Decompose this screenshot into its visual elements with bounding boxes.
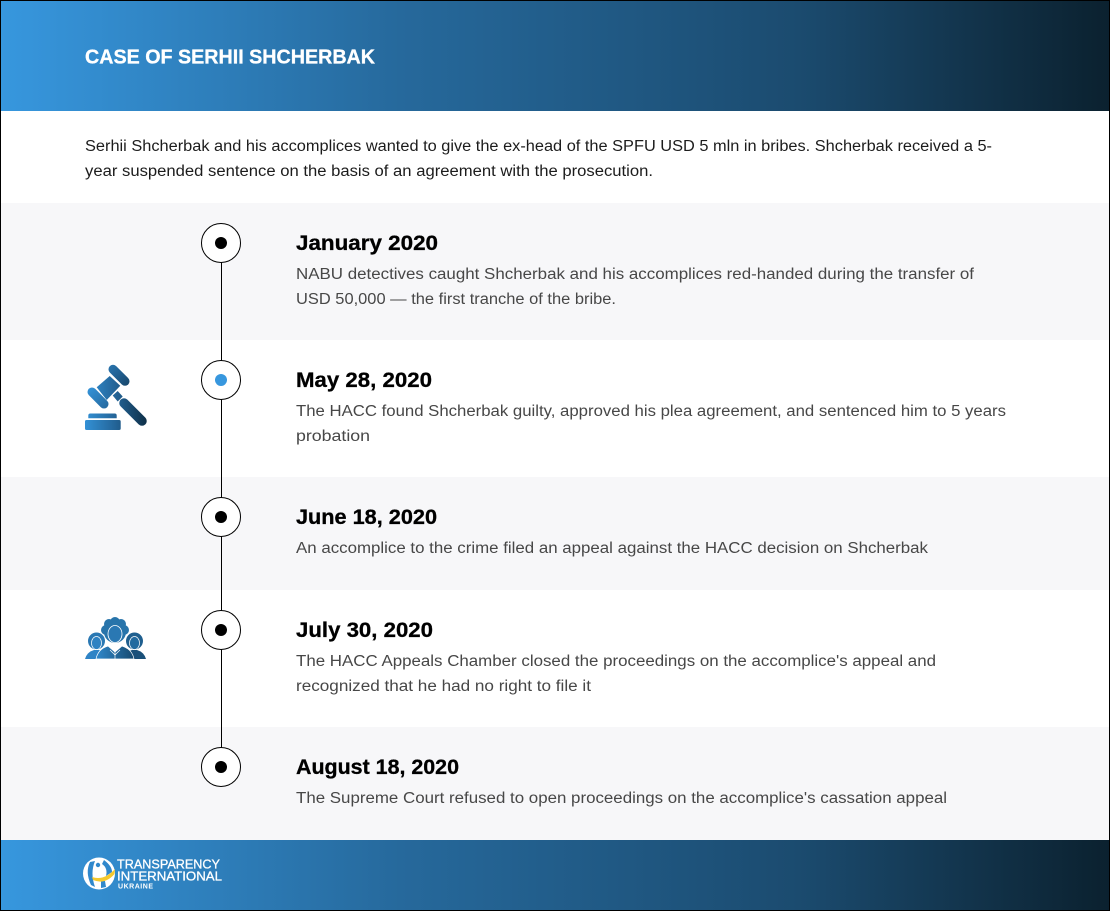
footer band xyxy=(1,840,1109,910)
logo: Transparency International Ukraine xyxy=(83,856,222,890)
timeline entry: January 2020 xyxy=(202,224,975,308)
marker: August 18, 2020 xyxy=(202,748,240,786)
description: July 30, 2020: recognized that he had no right to file it xyxy=(296,678,592,695)
description: January 2020: NABU detectives caught Shcherbak and his accomplices red-handed during the transfer of xyxy=(296,266,975,283)
title: CASE OF SERHII SHCHERBAK xyxy=(85,46,376,68)
logo wordmark: UKRAINE xyxy=(118,884,153,890)
description: May 28, 2020: probation xyxy=(296,428,370,445)
intro text xyxy=(85,138,992,180)
logo wordmark xyxy=(117,856,222,890)
date: June 18, 2020: June 18, 2020 xyxy=(296,506,437,529)
logo wordmark: INTERNATIONAL xyxy=(117,868,222,884)
date: May 28, 2020: May 28, 2020 xyxy=(296,369,432,392)
description: August 18, 2020: The Supreme Court refused to open proceedings on the accomplice's cassation appeal xyxy=(296,790,947,807)
marker: May 28, 2020 xyxy=(202,360,240,400)
description: July 30, 2020: The HACC Appeals Chamber closed the proceedings on the accomplice's appeal and xyxy=(296,653,936,670)
marker: January 2020 xyxy=(202,224,240,262)
logo emblem xyxy=(83,858,115,890)
header band xyxy=(1,1,1109,111)
timeline entry: August 18, 2020 xyxy=(202,748,947,807)
description: January 2020 xyxy=(296,266,975,308)
marker: June 18, 2020 xyxy=(202,498,240,536)
right person xyxy=(123,632,146,659)
description: January 2020: USD 50,000 — the first tranche of the bribe. xyxy=(296,291,616,308)
icon: gavel xyxy=(85,363,142,430)
logo wordmark: TRANSPARENCY xyxy=(117,856,220,872)
description: May 28, 2020 xyxy=(296,403,1006,445)
marker: July 30, 2020 xyxy=(202,610,240,650)
timeline entry: July 30, 2020 xyxy=(85,610,936,695)
left person xyxy=(85,632,108,659)
centre person xyxy=(96,617,134,659)
timeline entry: May 28, 2020 xyxy=(85,360,1006,445)
timeline entry: June 18, 2020 xyxy=(202,498,928,557)
icon: group of people xyxy=(85,617,146,659)
intro text: year suspended sentence on the basis of an agreement with the prosecution. xyxy=(85,163,653,180)
date: July 30, 2020: July 30, 2020 xyxy=(296,619,433,642)
timeline line xyxy=(221,243,222,767)
intro text: Serhii Shcherbak and his accomplices wanted to give the ex-head of the SPFU USD 5 mln in bribes. Shcherbak received a 5- xyxy=(85,138,992,155)
description: June 18, 2020: An accomplice to the crime filed an appeal against the HACC decision on Shcherbak xyxy=(296,540,928,557)
date: January 2020: January 2020 xyxy=(296,232,438,255)
description: July 30, 2020 xyxy=(296,653,936,695)
date: August 18, 2020: August 18, 2020 xyxy=(296,756,459,779)
description: May 28, 2020: The HACC found Shcherbak guilty, approved his plea agreement, and sentenced him to 5 years xyxy=(296,403,1006,420)
